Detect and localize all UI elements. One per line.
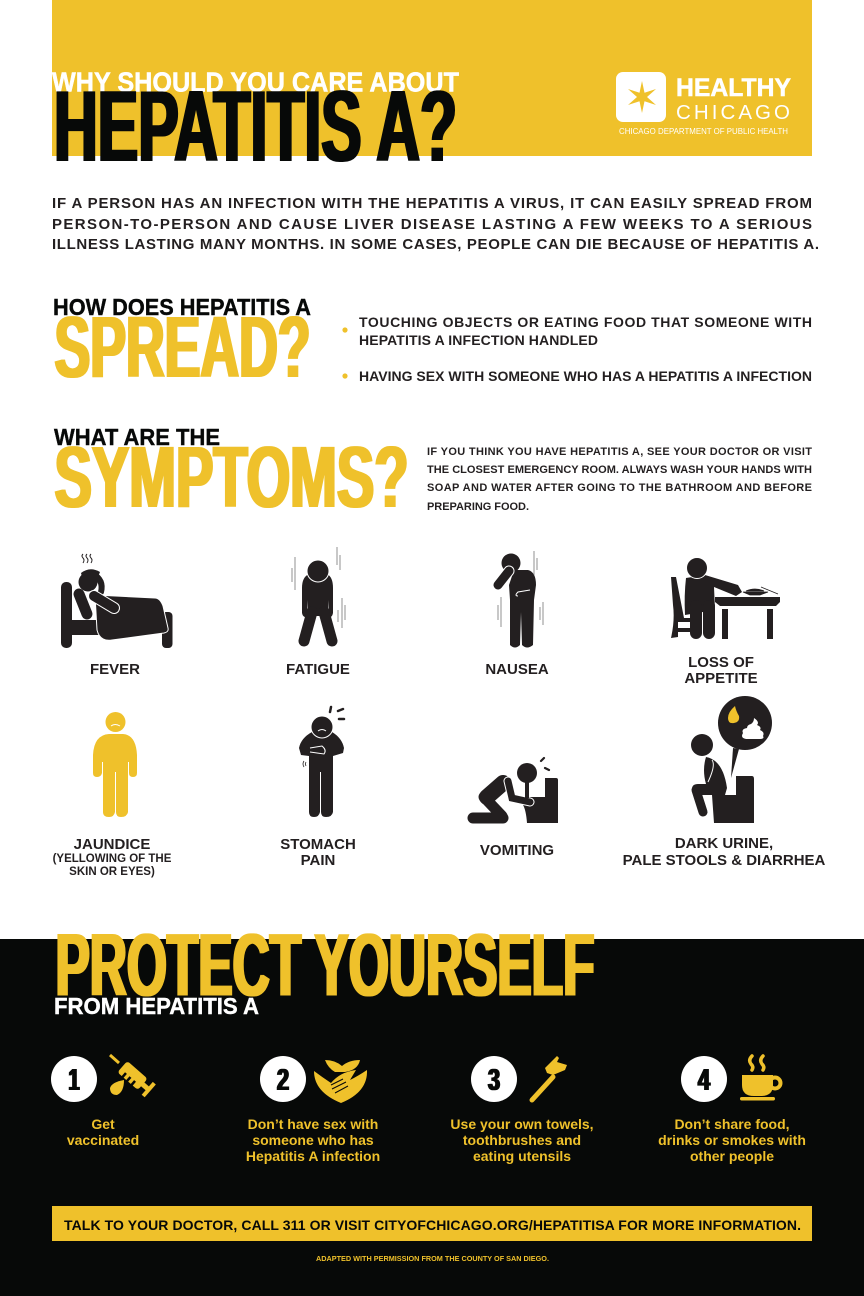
step 3: own towels, toothbrushes, utensils: eating utensils bbox=[473, 1148, 571, 1164]
spread bullet list: HEPATITIS A INFECTION HANDLED bbox=[359, 332, 598, 348]
label: jaundice: JAUNDICE bbox=[74, 836, 150, 853]
intro paragraph: ILLNESS LASTING MANY MONTHS. IN SOME CASES, PEOPLE CAN DIE BECAUSE OF HEPATITIS A. bbox=[52, 236, 819, 253]
symptoms advice text: SOAP AND WATER AFTER GOING TO THE BATHROOM AND BEFORE bbox=[427, 482, 812, 494]
icon: dark urine, pale stools and diarrhea bbox=[691, 696, 772, 823]
logo: Healthy Chicago: CHICAGO bbox=[676, 101, 790, 124]
label: nausea: NAUSEA bbox=[485, 661, 549, 678]
logo: Healthy Chicago bbox=[616, 72, 791, 136]
label: dark urine, pale stools and diarrhea: PALE STOOLS & DIARRHEA bbox=[623, 852, 826, 869]
heading: protect yourself: FROM HEPATITIS A bbox=[54, 993, 259, 1019]
intro paragraph bbox=[52, 195, 819, 253]
label: jaundice bbox=[53, 836, 172, 878]
text: PAIN bbox=[301, 852, 335, 869]
label: fatigue: FATIGUE bbox=[286, 661, 350, 678]
icon: loss of appetite bbox=[671, 558, 780, 639]
logo: Healthy Chicago: HEALTHY bbox=[676, 74, 791, 102]
heading: protect yourself bbox=[54, 914, 594, 1019]
step 3: own towels, toothbrushes, utensils: 3 bbox=[488, 1062, 500, 1097]
step 3: own towels, toothbrushes, utensils bbox=[450, 1056, 594, 1164]
label: stomach pain: STOMACH bbox=[280, 836, 356, 853]
spread bullet list bbox=[342, 314, 812, 384]
step 3: own towels, toothbrushes, utensils: toothbrushes and bbox=[463, 1132, 581, 1148]
heading: what are the symptoms bbox=[54, 424, 408, 526]
step 2: no sex: Hepatitis A infection bbox=[246, 1148, 380, 1164]
text: APPETITE bbox=[684, 670, 758, 687]
spread bullet list: TOUCHING OBJECTS OR EATING FOOD THAT SOMEONE WITH bbox=[359, 314, 812, 330]
heading: how does hepatitis A spread: HOW DOES HEPATITIS A bbox=[53, 294, 311, 320]
title bbox=[52, 66, 459, 183]
panel: protect yourself bbox=[0, 939, 864, 1296]
spread bullet list: HAVING SEX WITH SOMEONE WHO HAS A HEPATITIS A INFECTION bbox=[359, 368, 812, 384]
header band bbox=[52, 0, 812, 156]
icon: stomach pain bbox=[299, 707, 344, 817]
label: jaundice: (YELLOWING OF THE bbox=[53, 853, 172, 865]
symptoms advice text bbox=[427, 446, 812, 513]
call to action bar bbox=[52, 1206, 812, 1241]
intro paragraph: PERSON-TO-PERSON AND CAUSE LIVER DISEASE LASTING A FEW WEEKS TO A SERIOUS bbox=[52, 216, 812, 233]
symptoms advice text: IF YOU THINK YOU HAVE HEPATITIS A, SEE YOUR DOCTOR OR VISIT bbox=[427, 446, 812, 458]
icon: nausea bbox=[498, 551, 543, 648]
title: WHY SHOULD YOU CARE ABOUT bbox=[52, 66, 459, 98]
heading: what are the symptoms: SYMPTOMS? bbox=[54, 429, 408, 526]
step 4: don't share food: other people bbox=[690, 1148, 774, 1164]
step 1: get vaccinated bbox=[51, 1055, 156, 1148]
symptoms advice text: PREPARING FOOD. bbox=[427, 501, 529, 513]
heading: what are the symptoms: WHAT ARE THE bbox=[54, 424, 220, 450]
step 2: no sex: someone who has bbox=[252, 1132, 374, 1148]
step 1: get vaccinated: 1 bbox=[68, 1062, 80, 1097]
icon: jaundice bbox=[93, 712, 137, 817]
icon: fatigue bbox=[292, 547, 345, 641]
step 4: don't share food bbox=[658, 1056, 806, 1164]
label: vomiting: VOMITING bbox=[480, 842, 554, 859]
step 4: don't share food: Don’t share food, bbox=[674, 1116, 790, 1132]
step 2: no sex bbox=[246, 1056, 380, 1164]
logo: Healthy Chicago: CHICAGO DEPARTMENT OF PUBLIC HEALTH bbox=[619, 126, 788, 136]
footnote: ADAPTED WITH PERMISSION FROM THE COUNTY OF SAN DIEGO. bbox=[316, 1256, 549, 1263]
label: jaundice: SKIN OR EYES) bbox=[69, 866, 155, 878]
step 4: don't share food: drinks or smokes with bbox=[658, 1132, 806, 1148]
step 1: get vaccinated: vaccinated bbox=[67, 1132, 139, 1148]
intro paragraph: IF A PERSON HAS AN INFECTION WITH THE HEPATITIS A VIRUS, IT CAN EASILY SPREAD FROM bbox=[52, 195, 812, 212]
step 2: no sex: Don’t have sex with bbox=[248, 1116, 378, 1132]
heading: how does hepatitis A spread: SPREAD? bbox=[54, 299, 310, 396]
call to action bar: TALK TO YOUR DOCTOR, CALL 311 OR VISIT CITYOFCHICAGO.ORG/HEPATITISA FOR MORE INFORMATION. bbox=[64, 1217, 801, 1233]
step 4: don't share food: 4 bbox=[698, 1062, 711, 1097]
label: fever: FEVER bbox=[90, 661, 140, 678]
heading: how does hepatitis A spread bbox=[53, 294, 311, 396]
step 3: own towels, toothbrushes, utensils: Use your own towels, bbox=[450, 1116, 594, 1132]
icon: vomiting bbox=[473, 758, 558, 823]
step 2: no sex: 2 bbox=[277, 1062, 289, 1097]
icon: fever bbox=[61, 554, 172, 648]
title: HEPATITIS A? bbox=[54, 71, 457, 183]
label: dark urine, pale stools and diarrhea bbox=[623, 835, 826, 869]
label: loss of appetite: LOSS OF bbox=[688, 654, 754, 671]
symptoms advice text: THE CLOSEST EMERGENCY ROOM. ALWAYS WASH YOUR HANDS WITH bbox=[427, 464, 812, 476]
step 1: get vaccinated: Get bbox=[91, 1116, 115, 1132]
label: dark urine, pale stools and diarrhea: DARK URINE, bbox=[675, 835, 773, 852]
